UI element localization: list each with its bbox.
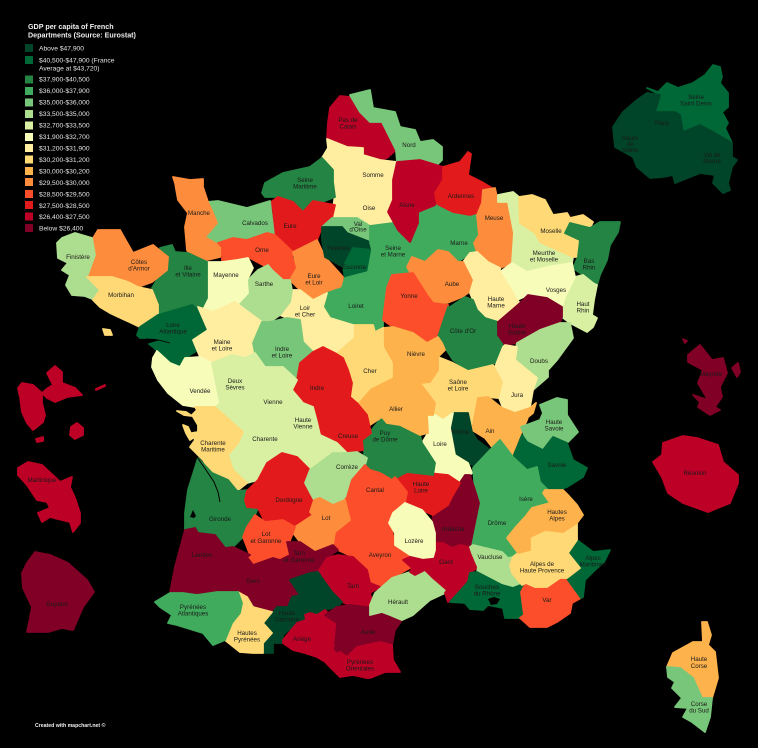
Bas Rhin: [565, 222, 620, 285]
Meurthe et Moselle: [498, 192, 573, 272]
legend: Average at $43,720): [39, 66, 99, 72]
Pyrénées Orientales: Pyrénées: [347, 659, 373, 666]
Loire Atlantique: [137, 305, 210, 367]
Maine et Loire: et Loire: [212, 346, 233, 352]
Nièvre: [383, 327, 445, 383]
Ille et Vilaine: Ille: [184, 265, 193, 272]
Alpes de Haute Provence: [510, 523, 580, 587]
Nord: [350, 90, 442, 165]
legend: $30,200-$31,200: [39, 157, 90, 164]
Deux Sèvres, Vienne, Haute Vienne and Charente: Haute: [295, 417, 312, 424]
legend: $27,500-$28,500: [39, 203, 90, 210]
Saône et Loire: et Loire: [448, 386, 469, 392]
Hautes Alpes: Alpes: [549, 516, 565, 522]
Indre and Creuse: Indre: [310, 385, 325, 392]
Mayenne: Mayenne: [213, 272, 239, 279]
Corrèze: Corrèze: [336, 464, 359, 471]
Loire: [422, 413, 472, 483]
Haute Saône: Saône: [508, 330, 526, 336]
Deux Sèvres, Vienne, Haute Vienne and Charente: Deux: [228, 378, 243, 385]
Ille et Vilaine: et Vilaine: [175, 272, 201, 278]
credit: Created with mapchart.net ©: [35, 722, 106, 729]
Landes, Gers and Tarn et Garonne: [170, 528, 338, 612]
Ain: [472, 397, 536, 457]
Sarthe: Sarthe: [255, 281, 274, 288]
Marne: Marne: [450, 240, 468, 247]
Ariège: [283, 610, 340, 663]
Puy de Dôme: Puy: [380, 430, 391, 437]
Nièvre: Nièvre: [407, 351, 425, 358]
title: Departments (Source: Eurostat): [28, 32, 137, 40]
Seine et Marne and Loiret: Loiret: [348, 303, 364, 310]
Hérault: Hérault: [388, 599, 408, 606]
Indre and Creuse: [292, 347, 371, 453]
Mayotte: [683, 339, 740, 415]
Landes, Gers and Tarn et Garonne: et Garonne: [284, 557, 315, 564]
legend: $28,500-$29,500: [39, 192, 90, 198]
Deux Sèvres, Vienne, Haute Vienne and Charente: Vienne: [263, 399, 283, 406]
Loire Atlantique: Loire: [166, 322, 180, 329]
Val d'Oise: d'Oise: [349, 226, 367, 234]
Charente Maritime: [177, 407, 247, 491]
Bas Rhin: Bas: [584, 258, 594, 265]
Vendée: Vendée: [190, 388, 211, 395]
Haute Loire: Haute: [413, 481, 430, 488]
Maine et Loire: [193, 302, 262, 363]
Pyrénées Atlantiques: [155, 592, 242, 645]
Dordogne: Dordogne: [275, 497, 303, 504]
legend: $40,500-$47,900 (France: [39, 58, 115, 64]
Finistère: Finistère: [66, 254, 90, 261]
Loire: Loire: [433, 441, 447, 448]
Saône et Loire: Saône: [449, 379, 467, 386]
Manche: Manche: [188, 210, 211, 217]
Indre and Creuse: Creuse: [338, 433, 359, 440]
Lozère: [389, 503, 435, 558]
Bouches du Rhône: [450, 572, 526, 618]
Vaucluse: Vaucluse: [478, 554, 503, 561]
Haute Marne: [463, 252, 520, 322]
Seine et Marne and Loiret: [323, 223, 413, 332]
Côte d'Or: Côte d'Or: [450, 328, 476, 335]
Yvelines: [322, 227, 372, 267]
Alpes Maritimes: Maritimes: [580, 562, 606, 568]
Pyrénées Orientales: [326, 642, 400, 678]
Savoie: Savoie: [548, 462, 567, 469]
Gironde: Gironde: [209, 516, 232, 523]
Savoie: [513, 435, 587, 492]
Eure et Loir: Eure: [307, 273, 321, 280]
Haut Rhin: Haut: [576, 301, 590, 308]
Aube: Aube: [445, 281, 460, 288]
Haute Saône: Haute: [509, 323, 526, 330]
Haute Loire: Loire: [414, 488, 428, 494]
Maine et Loire: Maine: [214, 339, 231, 346]
Cher: Cher: [363, 368, 377, 375]
Ariège: Ariège: [293, 636, 311, 643]
Indre et Loire: [253, 318, 313, 380]
Doubs: [515, 323, 573, 390]
Deux Sèvres, Vienne, Haute Vienne and Charente: Charente: [252, 436, 278, 443]
legend: $26,400-$27,500: [39, 214, 90, 221]
Haute Loire: [395, 472, 460, 515]
Bas Rhin: Rhin: [583, 264, 596, 272]
Tarn: [318, 555, 380, 607]
Orne: [218, 233, 297, 283]
Calvados: [205, 201, 274, 243]
Côte d'Or: [438, 297, 503, 371]
Essonne: [342, 248, 372, 278]
Paris, Hauts de Seine and Val de Marne: [613, 93, 737, 193]
Eure et Loir: et Loir: [305, 280, 323, 286]
Cher: [335, 325, 392, 403]
Lot et Garonne: et Garonne: [251, 538, 282, 545]
Deux Sèvres, Vienne, Haute Vienne and Charente: Vienne: [293, 424, 313, 430]
Paris, Hauts de Seine and Val de Marne: Paris: [655, 120, 669, 127]
Martinique: Martinique: [28, 477, 57, 484]
Gard: Gard: [439, 559, 453, 566]
Meuse: [474, 188, 514, 268]
Bouches du Rhône: Bouches: [475, 584, 499, 591]
Seine et Marne and Loiret: et Marne: [381, 252, 406, 258]
Pas de Calais: Pas de: [338, 117, 358, 124]
Loir et Cher: et Cher: [295, 312, 315, 318]
Morbihan: [87, 277, 158, 335]
legend: Below $26,400: [39, 226, 84, 232]
Martinique: [18, 462, 80, 532]
legend: $29,500-$30,000: [39, 180, 90, 187]
Somme and Oise: Oise: [363, 205, 376, 212]
Var: Var: [542, 597, 552, 604]
overseas departments and Corsica: [18, 339, 740, 732]
map of metropolitan France: [57, 90, 620, 678]
Hautes Pyrénées: Pyrénées: [234, 636, 260, 644]
legend: $31,900-$32,700: [39, 134, 90, 141]
Hautes Alpes: Hautes: [547, 509, 567, 516]
Ain: Ain: [486, 428, 495, 435]
Ille et Vilaine: [152, 245, 207, 315]
Aube: [407, 250, 472, 303]
Lot et Garonne: [243, 515, 295, 565]
Côtes d'Armor: d'Armor: [128, 266, 150, 272]
Charente Maritime: Maritime: [201, 446, 225, 454]
Doubs: Doubs: [530, 358, 548, 365]
Hautes Pyrénées: Hautes: [237, 630, 257, 637]
Haut Rhin: [560, 275, 597, 332]
Lot et Garonne: Lot: [262, 531, 271, 538]
Vaucluse: [470, 538, 522, 588]
Haute Saône: [498, 295, 562, 345]
legend: $32,700-$33,500: [39, 122, 90, 130]
Dordogne: [245, 453, 314, 527]
Sarthe: [235, 265, 292, 322]
Deux Sèvres, Vienne, Haute Vienne and Charente: Sèvres: [225, 384, 245, 392]
Pyrénées Atlantiques: Atlantiques: [178, 610, 208, 618]
Loire estuary: [146, 339, 170, 343]
Eure: Eure: [283, 223, 297, 230]
Lot: Lot: [322, 515, 331, 522]
Guadeloupe: [18, 366, 105, 442]
Isère and Drôme: Isère: [519, 496, 533, 503]
Pyrénées Orientales: Orientales: [346, 666, 374, 672]
Somme and Oise: Somme: [362, 172, 384, 179]
Ardennes: [435, 152, 492, 215]
Ardèche: Ardèche: [441, 526, 465, 533]
Haute Savoie: Haute: [546, 419, 563, 426]
Morbihan: Morbihan: [108, 292, 134, 299]
Alpes Maritimes: [567, 540, 610, 598]
Nord: Nord: [402, 142, 416, 149]
Landes, Gers and Tarn et Garonne: Gers: [246, 578, 260, 585]
Meurthe et Moselle: et Moselle: [530, 256, 559, 264]
Rhône: Rhône: [451, 429, 470, 436]
Eure et Loir: [290, 240, 343, 300]
Somme and Oise: [322, 139, 397, 226]
Haute Corse: [667, 622, 718, 698]
Cantal and Aveyron: [333, 465, 410, 590]
legend: $30,000-$30,200: [39, 168, 90, 176]
Vosges: Vosges: [546, 287, 566, 294]
Calvados: Calvados: [242, 220, 268, 227]
Haute Garonne: [263, 572, 342, 653]
Hautes Alpes: [507, 490, 583, 553]
Réunion: [653, 436, 738, 512]
Paris, Hauts de Seine and Val de Marne: Seine: [622, 147, 638, 154]
Val d'Oise: [322, 218, 370, 242]
Lozère: Lozère: [405, 538, 424, 545]
legend: $36,000-$37,900: [39, 88, 90, 95]
Aude: Aude: [361, 629, 376, 636]
Haute Savoie: Savoie: [545, 426, 564, 432]
Seine Maritime: Seine: [297, 177, 313, 184]
Paris, Hauts de Seine and Val de Marne: Hauts: [622, 135, 638, 142]
Eure: [271, 197, 335, 252]
Seine Saint Denis: [647, 65, 732, 143]
Essonne: Essonne: [342, 264, 367, 271]
Moselle: Moselle: [540, 228, 562, 235]
Vendée: [152, 351, 220, 407]
Haute Marne: Haute: [488, 296, 505, 303]
Alpes Maritimes: Alpes: [585, 555, 601, 562]
legend: Above $47,900: [39, 46, 84, 52]
Seine Saint Denis: Seine: [688, 94, 704, 101]
legend: $33,500-$35,000: [39, 111, 90, 118]
Landes, Gers and Tarn et Garonne: Landes: [192, 552, 212, 559]
Ardèche: [432, 475, 479, 548]
Paris, Hauts de Seine and Val de Marne: de: [627, 141, 634, 148]
Haute Corse: Haute: [691, 656, 708, 663]
Indre et Loire: et Loire: [272, 352, 293, 360]
legend: $37,900-$40,500: [39, 76, 90, 84]
Finistère: [57, 233, 100, 300]
Corrèze: [305, 452, 367, 505]
Loir et Cher: Loir: [300, 305, 310, 312]
legend: $31,200-$31,900: [39, 146, 90, 152]
Indre et Loire: Indre: [275, 346, 290, 353]
Isère and Drôme: Drôme: [488, 520, 507, 527]
Corse du Sud: du Sud: [689, 708, 709, 714]
Aisne: [388, 160, 443, 242]
Mayotte: Mayotte: [700, 371, 723, 378]
Réunion: Réunion: [683, 470, 707, 477]
Seine Saint Denis: Saint Denis: [680, 100, 712, 108]
Isère and Drôme: [470, 440, 550, 558]
Hautes Pyrénées: [225, 592, 272, 653]
Pas de Calais: [327, 96, 396, 160]
Var: [520, 578, 581, 627]
Mayenne: [198, 258, 253, 312]
Pyrénées Atlantiques: Pyrénées: [180, 604, 206, 611]
Ardennes: Ardennes: [448, 193, 474, 200]
Alpes de Haute Provence: Alpes de: [530, 561, 555, 568]
Guyane: Guyane: [46, 601, 68, 608]
Landes, Gers and Tarn et Garonne: Tarn: [293, 550, 306, 557]
Bouches du Rhône: du Rhône: [474, 590, 501, 598]
Haute Corse: Corse: [691, 663, 708, 670]
Côtes d'Armor: [87, 230, 168, 287]
Hérault: [370, 570, 447, 620]
Corse du Sud: [667, 667, 712, 732]
Paris, Hauts de Seine and Val de Marne: Marne: [703, 158, 721, 165]
Rhône: [450, 413, 490, 467]
Vosges: [500, 263, 575, 307]
Jura: [495, 345, 537, 413]
Yvelines: Yvelines: [326, 245, 350, 252]
Haute Garonne: Garonne: [275, 616, 300, 624]
Haut Rhin: Rhin: [577, 308, 590, 314]
Meurthe et Moselle: Meurthe: [533, 250, 556, 257]
Puy de Dôme: de Dôme: [372, 436, 398, 444]
Yonne: Yonne: [400, 293, 418, 300]
Puy de Dôme: [363, 417, 435, 480]
Seine et Marne and Loiret: Seine: [385, 245, 401, 252]
Moselle: [519, 195, 593, 257]
Cantal and Aveyron: Cantal: [366, 487, 384, 494]
Val d'Oise: Val: [354, 221, 362, 228]
Deux Sèvres, Vienne, Haute Vienne and Charente: [212, 353, 347, 483]
Allier: [357, 377, 435, 435]
Loire Atlantique: Atlantique: [159, 328, 187, 336]
Lot: [293, 498, 350, 552]
legend: $35,000-$36,000: [39, 100, 90, 106]
Loir et Cher: [280, 290, 353, 353]
Saône et Loire: [420, 357, 502, 427]
Haute Savoie: [521, 398, 578, 450]
title: GDP per capita of French: [28, 23, 114, 31]
Guyane: [22, 552, 94, 632]
Haute Marne: Marne: [487, 302, 505, 310]
Charente Maritime: Charente: [200, 440, 226, 447]
Aude: [325, 605, 402, 657]
Tarn: Tarn: [347, 583, 360, 590]
Paris, Hauts de Seine and Val de Marne: Val de: [703, 152, 721, 159]
Cantal and Aveyron: Aveyron: [369, 552, 392, 559]
Seine Maritime: Maritime: [293, 184, 317, 190]
Seine Maritime: [262, 158, 335, 212]
Alpes de Haute Provence: Haute Provence: [520, 568, 565, 574]
Gironde: [185, 457, 258, 548]
Aisne: Aisne: [399, 202, 415, 209]
Manche: [173, 177, 222, 262]
Haute Garonne: Haute: [279, 610, 296, 617]
legend: [25, 44, 115, 232]
Marne: [410, 204, 479, 262]
Côtes d'Armor: Côtes: [131, 259, 147, 266]
Meuse: Meuse: [485, 215, 504, 222]
Allier: Allier: [389, 406, 403, 413]
Yonne: [383, 273, 448, 343]
Pas de Calais: Calais: [339, 124, 357, 130]
title: [28, 23, 137, 40]
inset: Paris region: [613, 65, 737, 193]
Jura: Jura: [511, 392, 524, 399]
Gard: [403, 543, 478, 602]
Orne: Orne: [255, 247, 269, 254]
Corse du Sud: Corse: [691, 701, 708, 708]
